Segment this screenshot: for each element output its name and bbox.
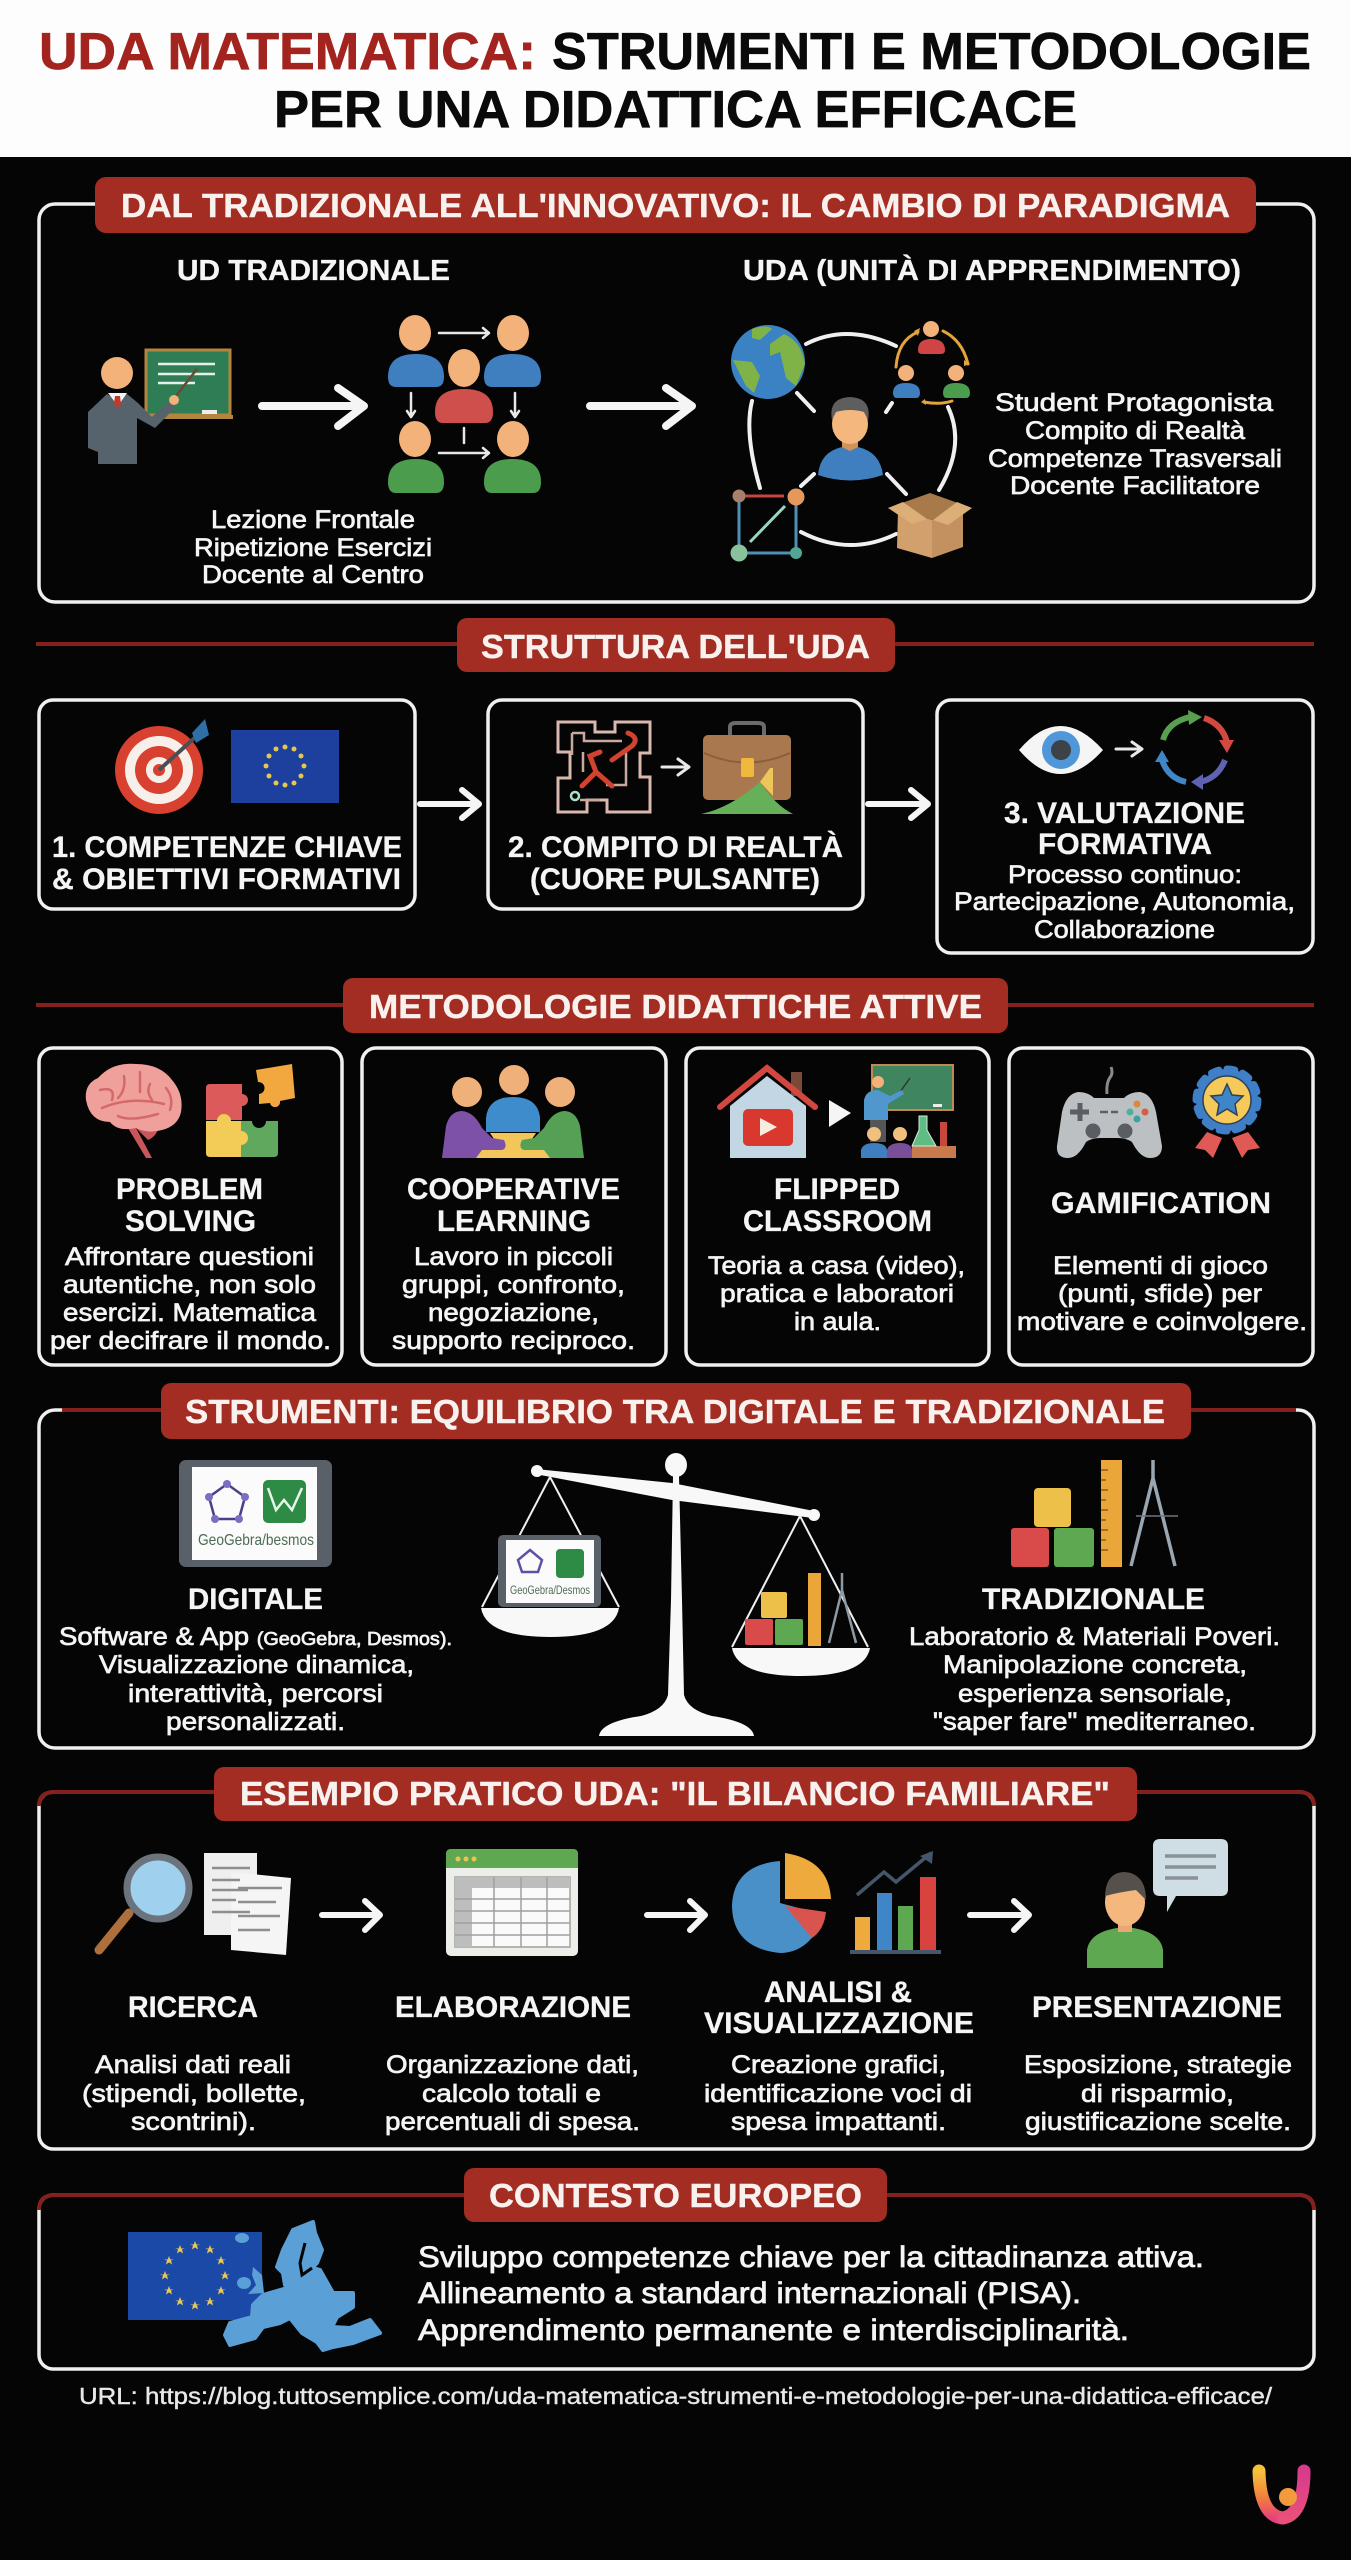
card text: per decifrare il mondo. <box>50 1327 331 1355</box>
subheading: UD tradizionale: UD TRADIZIONALE <box>177 255 450 287</box>
arrow: small <box>662 759 689 775</box>
logo <box>1259 2471 1304 2518</box>
text: UDA features: Compito di Realtà <box>1025 417 1245 445</box>
card text: in aula. <box>794 1308 881 1336</box>
text: UDA features: Docente Facilitatore <box>1010 472 1260 500</box>
icon: students in rows <box>388 315 541 493</box>
card title: GAMIFICATION <box>1051 1187 1271 1220</box>
section heading: metodologie <box>36 978 1314 1033</box>
card title: COOPERATIVE <box>407 1173 620 1206</box>
text: tradizionale features: Lezione Frontale <box>211 506 415 534</box>
step 1 text: scontrini). <box>131 2108 256 2136</box>
text: digitale: Visualizzazione dinamica, <box>99 1651 414 1679</box>
step 3 text: identificazione voci di <box>704 2080 972 2108</box>
icon: briefcase on hill <box>701 723 793 814</box>
card text <box>1017 1252 1307 1336</box>
card text: Partecipazione, Autonomia, <box>954 888 1295 916</box>
panel: esempio pratico <box>39 1767 1314 2149</box>
panel: contesto europeo <box>39 2168 1314 2369</box>
section heading: struttura <box>36 618 1314 672</box>
icon: pie chart <box>732 1853 831 1953</box>
icon: network task <box>730 488 804 562</box>
card text: pratica e laboratori <box>720 1280 954 1308</box>
text: tradizionale <box>909 1623 1280 1736</box>
text: tradizionale: "saper fare" mediterraneo. <box>933 1708 1256 1736</box>
card: problem solving <box>39 1048 342 1365</box>
right pan with tools <box>732 1573 870 1676</box>
arrow: group to UDA <box>590 388 692 426</box>
icon: globe <box>731 325 805 399</box>
icon: collaborative group <box>893 321 970 405</box>
text: UDA features <box>988 389 1282 500</box>
card: cooperative learning <box>362 1048 666 1365</box>
card text: FORMATIVA <box>1038 828 1212 861</box>
left pan with tablet <box>481 1535 619 1637</box>
arrow: small <box>1116 742 1142 756</box>
panel: strumenti <box>39 1383 1314 1748</box>
step 2 text: percentuali di spesa. <box>385 2108 640 2136</box>
header band with title <box>0 0 1351 157</box>
icon: teacher at blackboard <box>88 350 233 464</box>
card text: motivare e coinvolgere. <box>1017 1308 1307 1336</box>
icon: gamepad <box>1057 1067 1162 1158</box>
icon: tablet with math apps: GeoGebra/besmos <box>198 1532 314 1549</box>
step 1 text: RICERCA <box>128 1991 258 2024</box>
card text: autentiche, non solo <box>63 1271 316 1299</box>
icon: EU flag <box>231 730 339 803</box>
step 3 text: ANALISI & <box>764 1976 912 2009</box>
card: flipped classroom <box>686 1048 989 1365</box>
left pan with tablet: GeoGebra/Desmos <box>510 1583 590 1597</box>
step 1 text: (stipendi, bollette, <box>82 2080 306 2108</box>
text: tradizionale: Manipolazione concreta, <box>943 1651 1247 1679</box>
icon: EU flag with stars <box>128 2232 262 2320</box>
step 2 text: calcolo totali e <box>422 2080 601 2108</box>
arrow: analisi to presentazione <box>970 1901 1029 1930</box>
step 2 text: Organizzazione dati, <box>386 2051 639 2079</box>
step 4 text <box>1024 1991 1292 2136</box>
card text: Processo continuo: <box>1008 861 1242 889</box>
icon: balance scale <box>481 1453 870 1736</box>
card: compito di realta <box>488 700 863 909</box>
step 4 text: di risparmio, <box>1081 2080 1234 2108</box>
card text: Collaborazione <box>1034 916 1215 944</box>
card title: CLASSROOM <box>743 1205 932 1238</box>
icon: tablet with math apps <box>179 1460 332 1567</box>
card: gamification <box>1009 1048 1313 1365</box>
card title <box>116 1173 263 1238</box>
text: european context: Apprendimento permanente e interdisciplinarità. <box>418 2314 1129 2347</box>
text: digitale: personalizzati. <box>166 1708 345 1736</box>
text: UDA features: Competenze Trasversali <box>988 445 1282 473</box>
card text: supporto reciproco. <box>392 1327 635 1355</box>
section heading: struttura: STRUTTURA DELL'UDA <box>481 628 870 665</box>
panel: paradigm shift <box>39 177 1314 602</box>
arrow: step 2 to step 3 <box>868 790 928 818</box>
card text: 3. VALUTAZIONE <box>1004 797 1245 830</box>
card: competenze chiave <box>39 700 415 909</box>
step 2 text <box>385 1991 640 2136</box>
text: UDA features: Student Protagonista <box>995 389 1273 417</box>
icon: maze with red path <box>558 722 650 812</box>
text: tradizionale features: Docente al Centro <box>202 561 424 589</box>
icon: target with dart <box>115 719 209 814</box>
card title <box>508 830 843 896</box>
card text: (punti, sfide) per <box>1058 1280 1262 1308</box>
heading: esempio pratico <box>214 1767 1137 1821</box>
card text: gruppi, confronto, <box>402 1271 625 1299</box>
icon: cardboard box <box>888 493 972 558</box>
heading: paradigm shift: DAL TRADIZIONALE ALL'INNOVATIVO: IL CAMBIO DI PARADIGMA <box>121 187 1230 224</box>
heading: contesto europeo <box>464 2168 887 2222</box>
step 3 text: VISUALIZZAZIONE <box>704 2007 974 2040</box>
icon: bar chart <box>850 1851 941 1954</box>
subheading: UDA: UDA (UNITÀ DI APPRENDIMENTO) <box>743 253 1241 287</box>
step 3 text <box>704 1976 974 2136</box>
icon: blocks, ruler and compass <box>1011 1460 1178 1567</box>
card text: Lavoro in piccoli <box>414 1243 613 1271</box>
diagram: UDA hub with student at centre <box>730 321 972 562</box>
text: tradizionale: esperienza sensoriale, <box>958 1680 1232 1708</box>
arrow: elaborazione to analisi <box>647 1901 705 1930</box>
card title: PROBLEM <box>116 1173 263 1206</box>
step 1 text <box>82 1991 306 2136</box>
step 2 text: ELABORAZIONE <box>395 1991 631 2024</box>
header band with title: PER UNA DIDATTICA EFFICACE <box>274 81 1077 139</box>
label: tradizionale: TRADIZIONALE <box>982 1583 1205 1616</box>
icon: presenter with speech bubble <box>1087 1839 1228 1968</box>
card title: (CUORE PULSANTE) <box>530 863 820 896</box>
header band with title: STRUMENTI E METODOLOGIE <box>552 23 1311 81</box>
card text: Elementi di gioco <box>1053 1252 1268 1280</box>
heading: strumenti: STRUMENTI: EQUILIBRIO TRA DIGITALE E TRADIZIONALE <box>185 1393 1165 1430</box>
text: digitale: Software & App (GeoGebra, Desmos). <box>59 1623 452 1651</box>
card text: negoziazione, <box>428 1299 599 1327</box>
icon: spreadsheet <box>446 1849 578 1956</box>
text: tradizionale: Laboratorio & Materiali Poveri. <box>909 1623 1280 1651</box>
card title: SOLVING <box>125 1205 256 1238</box>
card text: Affrontare questioni <box>65 1243 314 1271</box>
step 4 text: Esposizione, strategie <box>1024 2051 1292 2079</box>
card text <box>392 1243 635 1355</box>
card: valutazione formativa <box>937 700 1313 953</box>
icon: play triangle <box>829 1100 851 1127</box>
source URL: URL: https://blog.tuttosemplice.com/uda-matematica-strumenti-e-metodologie-per-una-didattica-efficace/ <box>79 2383 1273 2409</box>
icon: student protagonist <box>818 397 883 480</box>
heading: paradigm shift <box>95 177 1256 233</box>
text: tradizionale features <box>194 506 432 589</box>
card text: Teoria a casa (video), <box>708 1252 965 1280</box>
card title <box>52 831 402 896</box>
icon: classroom with lab <box>861 1065 956 1158</box>
heading: esempio pratico: ESEMPIO PRATICO UDA: "IL BILANCIO FAMILIARE" <box>240 1775 1110 1812</box>
label: digitale: DIGITALE <box>188 1583 323 1616</box>
card title: FLIPPED <box>774 1173 900 1206</box>
icon: brain <box>86 1064 182 1158</box>
arrow: ricerca to elaborazione <box>322 1901 380 1930</box>
step 4 text: giustificazione scelte. <box>1025 2108 1291 2136</box>
step 1 text: Analisi dati reali <box>95 2051 291 2079</box>
section heading: metodologie: METODOLOGIE DIDATTICHE ATTIVE <box>369 988 982 1025</box>
step 4 text: PRESENTAZIONE <box>1032 1991 1282 2024</box>
text: digitale <box>59 1623 452 1736</box>
icon: magnifier and receipts <box>99 1853 291 1955</box>
step 3 text: spesa impattanti. <box>731 2108 946 2136</box>
icon: badge <box>1195 1069 1260 1158</box>
icon: cycle arrows <box>1155 710 1234 790</box>
card title <box>743 1173 932 1238</box>
step 3 text: Creazione grafici, <box>731 2051 946 2079</box>
card title: LEARNING <box>437 1205 591 1238</box>
card title: 1. COMPETENZE CHIAVE <box>52 831 402 864</box>
card text: esercizi. Matematica <box>63 1299 316 1327</box>
card text <box>954 797 1295 944</box>
icon: eye <box>1019 726 1103 774</box>
icon: map of Europe <box>225 2222 380 2350</box>
text: european context: Sviluppo competenze chiave per la cittadinanza attiva. <box>418 2241 1204 2274</box>
heading: strumenti <box>161 1383 1191 1439</box>
icon: house with video <box>720 1068 815 1158</box>
card title <box>407 1173 620 1238</box>
heading: contesto europeo: CONTESTO EUROPEO <box>489 2177 862 2214</box>
text: digitale: interattività, percorsi <box>128 1680 383 1708</box>
text: tradizionale features: Ripetizione Esercizi <box>194 534 432 562</box>
text: european context: Allineamento a standard internazionali (PISA). <box>418 2277 1081 2310</box>
card title: 2. COMPITO DI REALTÀ <box>508 830 843 864</box>
icon: team around table <box>442 1065 584 1158</box>
card title: & OBIETTIVI FORMATIVI <box>52 863 401 896</box>
card text <box>50 1243 331 1355</box>
arrow: step 1 to step 2 <box>420 790 479 818</box>
header band with title: UDA MATEMATICA: <box>39 23 536 81</box>
card text <box>708 1252 965 1336</box>
icon: puzzle <box>206 1064 295 1157</box>
arrow: tradizionale to group <box>262 388 364 426</box>
text: european context <box>418 2241 1204 2347</box>
